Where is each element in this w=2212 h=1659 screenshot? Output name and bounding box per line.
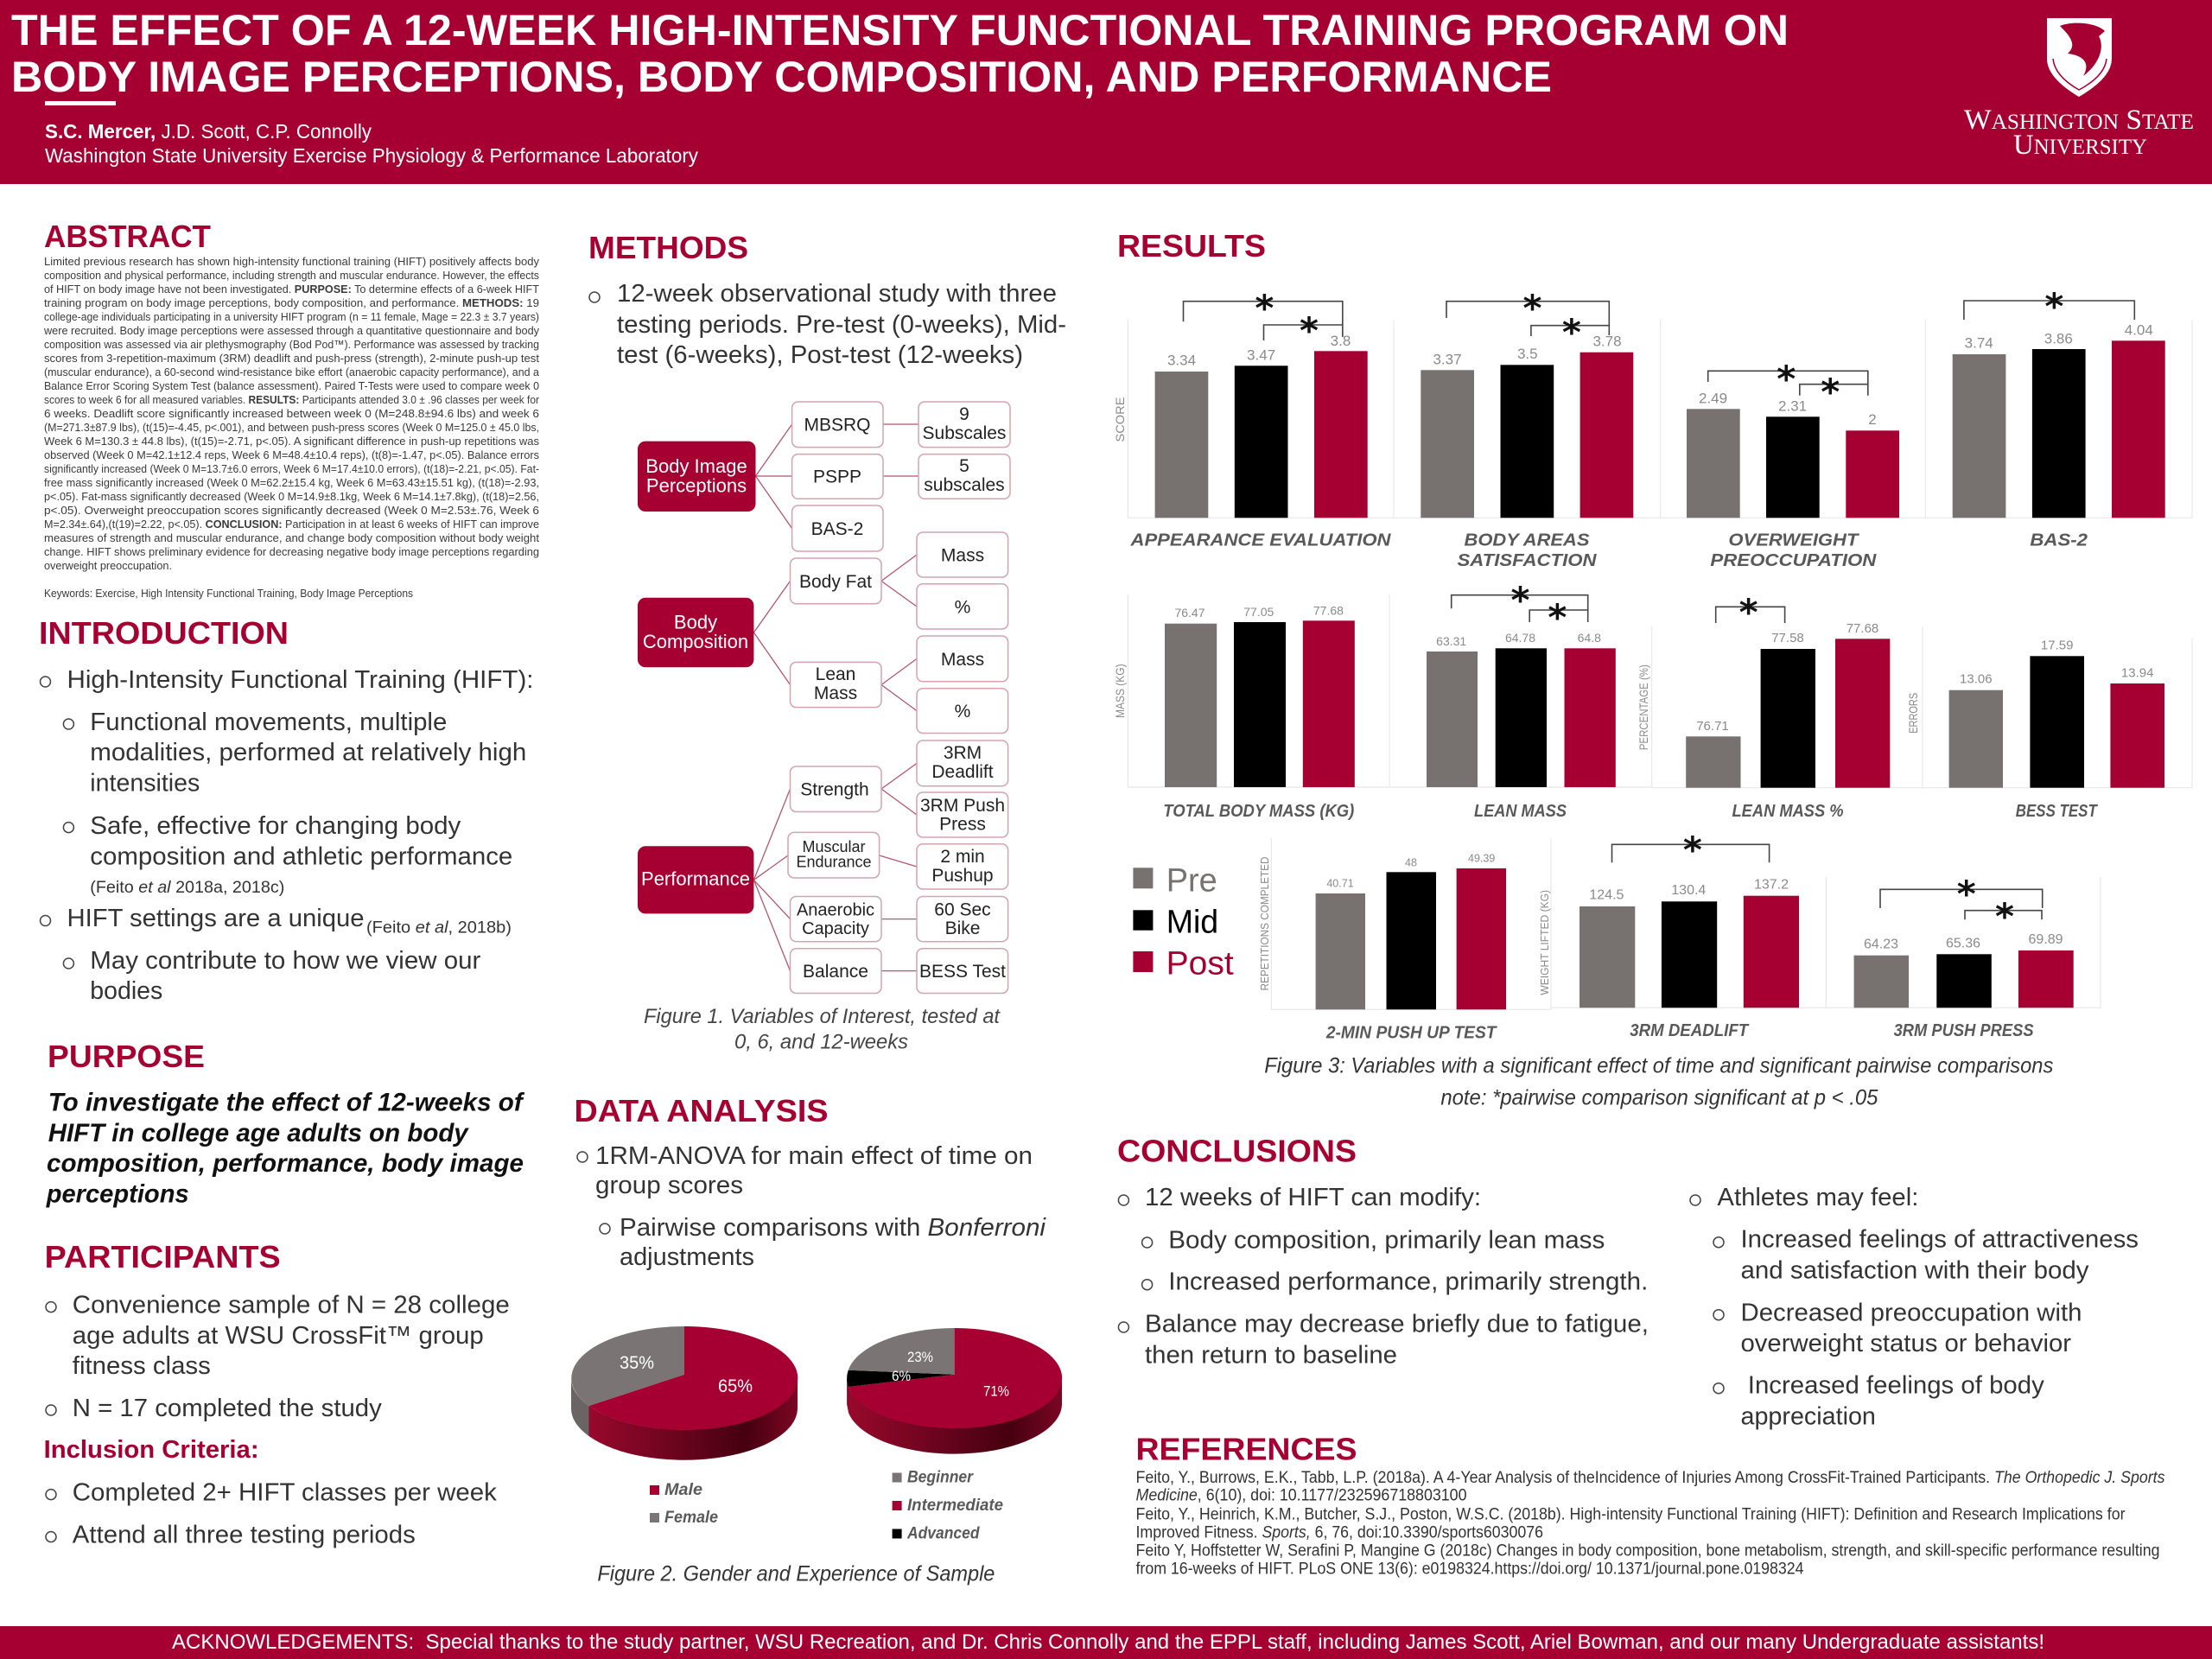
- abstract body text: (muscular endurance), a 60-second wind-resistance bike effort (anaerobic capacity performance), and a: [44, 365, 540, 378]
- panel: data analysis: [574, 1093, 1047, 1271]
- chart: 3RM push press: 64.23: [1864, 937, 1898, 951]
- abstract body text: overweight preoccupation.: [44, 559, 172, 572]
- significance brackets: *: [1562, 311, 1581, 353]
- reference list: Feito, Y., Heinrich, K.M., Butcher, S.J., Poston, W.S.C. (2018b). High-intensity Functional Training (HIFT): Definition and Research Implications for: [1135, 1505, 2126, 1523]
- pie chart: experience: 23%: [907, 1349, 933, 1365]
- chart: 3RM deadlift: 124.5: [1589, 888, 1624, 903]
- chart: lean mass percent: 76.71: [1696, 719, 1729, 734]
- abstract body text: Week 6 M=130.3 ± 44.8 lbs), (t(15)=-2.71, p<.05). A significant difference in push-up repetitions was: [44, 435, 539, 448]
- conclusions right column: Athletes may feel:: [1717, 1184, 1918, 1211]
- chart: total body mass: 77.05: [1243, 605, 1274, 619]
- significance brackets: [1184, 287, 1343, 352]
- introduction bullets: intensities: [90, 769, 200, 797]
- conclusions right column: and satisfaction with their body: [1740, 1256, 2089, 1284]
- chart: appearance evaluation: SCORE: [1113, 397, 1127, 442]
- abstract body text: composition was assessed via air plethysmography (Bod Pod™). Performance was assessed by tracking: [44, 338, 539, 351]
- introduction bullets: May contribute to how we view our: [90, 947, 481, 975]
- chart: 2-min push up test: 40.71: [1326, 877, 1354, 889]
- chart: appearance evaluation: 3.34: [1167, 353, 1196, 369]
- abstract body text: [43, 255, 540, 600]
- conclusions right column: overweight status or behavior: [1740, 1330, 2071, 1357]
- nodes: second level measures: Lean: [816, 664, 855, 684]
- chart: lean mass percent: [1637, 591, 1923, 821]
- nodes: third level measures: Mass: [941, 650, 984, 670]
- nodes: second level measures: Capacity: [802, 919, 869, 938]
- node: performance: Performance: [641, 868, 750, 890]
- chart: overweight preoccupation: 2.49: [1699, 391, 1727, 407]
- significance bracket: [1716, 591, 1785, 633]
- chart: lean mass percent: 77.68: [1847, 621, 1878, 636]
- chart: 2-min push up test: REPETITIONS COMPLETED: [1258, 857, 1271, 990]
- WSU wordmark: UNIVERSITY: [2013, 130, 2147, 161]
- chart: 3RM push press: [1826, 873, 2101, 1040]
- participants bullets: fitness class: [73, 1352, 211, 1380]
- purpose statement: perceptions: [46, 1180, 189, 1209]
- WSU wordmark: [1964, 105, 2194, 161]
- figure 3 caption: Figure 3: Variables with a significant effect of time and significant pairwise comparisons: [1264, 1054, 2053, 1078]
- chart: 2-min push up test: 48: [1405, 857, 1417, 869]
- nodes: third level measures: 3RM: [944, 743, 982, 763]
- nodes: second level measures: BAS-2: [811, 519, 863, 539]
- conclusions right column: Increased feelings of body: [1748, 1372, 2044, 1400]
- methods bullet: [589, 280, 1066, 369]
- nodes: third level measures: 9: [959, 404, 969, 424]
- participants bullets: N = 17 completed the study: [73, 1395, 382, 1422]
- nodes: second level measures: Mass: [814, 683, 857, 703]
- authors and affiliation: [45, 120, 698, 167]
- nodes: third level measures: subscales: [924, 475, 1005, 495]
- chart: 3RM deadlift: 130.4: [1671, 883, 1706, 898]
- significance brackets: *: [1300, 309, 1319, 352]
- pie legend: gender: [650, 1481, 718, 1527]
- significance brackets: *: [1957, 873, 1976, 915]
- chart: total body mass: TOTAL BODY MASS (KG): [1163, 802, 1355, 821]
- chart: total body mass: 76.47: [1174, 606, 1205, 620]
- inclusion criteria: Completed 2+ HIFT classes per week: [73, 1478, 497, 1506]
- chart: 2-min push up test: 49.39: [1468, 853, 1495, 865]
- conclusions left column: [1118, 1184, 1649, 1369]
- participants bullets: [46, 1291, 510, 1422]
- reference list: Medicine, 6(10), doi: 10.1177/232596718803100: [1135, 1487, 1467, 1505]
- chart: overweight preoccupation: OVERWEIGHT: [1728, 531, 1859, 550]
- nodes: third level measures: 2 min: [940, 847, 985, 867]
- nodes: third level measures: 5: [959, 456, 969, 476]
- figure 1 caption: 0, 6, and 12-weeks: [734, 1031, 908, 1054]
- methods bullet: testing periods. Pre-test (0-weeks), Mid-: [617, 311, 1066, 339]
- introduction bullets: HIFT settings are a unique: [67, 905, 365, 932]
- authors and affiliation: S.C. Mercer, J.D. Scott, C.P. Connolly: [45, 120, 372, 143]
- reference list: Improved Fitness. Sports, 6, 76, doi:10.3390/sports6030076: [1135, 1523, 1543, 1541]
- abstract body text: measures of strength and muscular endurance, and change body composition without body weight: [44, 531, 539, 544]
- title: [11, 6, 1789, 105]
- chart: 2-min push up test: 2-MIN PUSH UP TEST: [1325, 1024, 1497, 1043]
- significance bracket: [1612, 829, 1770, 871]
- significance brackets: *: [1523, 287, 1542, 329]
- figure 3 caption: [1264, 1054, 2053, 1109]
- chart: overweight preoccupation: 2: [1868, 411, 1877, 428]
- nodes: third level measures: [917, 402, 1010, 994]
- abstract body text: scores from 3-repetition-maximum (3RM) deadlift and push-press (strength), 2-minute push-up test: [44, 352, 539, 365]
- significance brackets: [1880, 873, 2043, 938]
- node: body image perceptions: Perceptions: [646, 474, 747, 496]
- nodes: third level measures: Pushup: [931, 866, 994, 886]
- nodes: third level measures: Press: [939, 814, 986, 835]
- icon: WSU shield logo: [2047, 18, 2112, 97]
- pie legend: experience: Beginner: [907, 1469, 974, 1487]
- pie chart: gender: 35%: [620, 1353, 654, 1373]
- panel: purpose: [46, 1039, 525, 1209]
- chart: 3RM deadlift: [1538, 829, 1826, 1040]
- chart: total body mass: [1113, 594, 1389, 821]
- WSU wordmark: WASHINGTON STATE: [1964, 105, 2194, 136]
- chart: lean mass percent: PERCENTAGE (%): [1637, 664, 1650, 750]
- chart: BAS-2: 3.86: [2044, 330, 2073, 346]
- chart: total body mass: MASS (KG): [1113, 664, 1127, 718]
- conclusions right column: Decreased preoccupation with: [1740, 1299, 2082, 1326]
- introduction bullets: modalities, performed at relatively high: [90, 739, 526, 766]
- chart: lean mass: LEAN MASS: [1474, 802, 1567, 821]
- significance brackets: *: [1548, 596, 1567, 639]
- title: BODY IMAGE PERCEPTIONS, BODY COMPOSITION, AND PERFORMANCE: [11, 53, 1552, 101]
- introduction bullets: High-Intensity Functional Training (HIFT):: [67, 666, 534, 694]
- chart: BESS test: ERRORS: [1906, 693, 1920, 734]
- chart: appearance evaluation: [1113, 287, 1394, 550]
- legend: pre mid post: [1133, 863, 1234, 982]
- abstract body text: 6 weeks. Deadlift score significantly increased between week 0 (M=248.8±94.6 lbs) and week 6: [44, 407, 539, 420]
- nodes: third level measures: BESS Test: [919, 962, 1006, 982]
- legend: pre mid post: Pre: [1166, 863, 1217, 899]
- heading: data analysis: DATA ANALYSIS: [574, 1093, 828, 1128]
- heading: purpose: PURPOSE: [48, 1039, 205, 1074]
- abstract body text: p<.05). Overweight preoccupation scores significantly decreased (Week 0 M=2.53±.76, Week 6: [44, 504, 539, 517]
- chart: 2-min push up test: [1258, 838, 1551, 1043]
- data analysis bullets: Pairwise comparisons with Bonferroni: [620, 1214, 1047, 1242]
- nodes: second level measures: Balance: [803, 962, 868, 982]
- conclusions left column: Body composition, primarily lean mass: [1168, 1226, 1605, 1254]
- chart: body areas satisfaction: SATISFACTION: [1457, 551, 1597, 570]
- chart: BESS test: 13.94: [2121, 665, 2153, 680]
- chart: 3RM deadlift: 137.2: [1754, 878, 1789, 893]
- figure 1: variables of interest tree diagram: [638, 402, 1010, 994]
- significance bracket: *: [1739, 591, 1758, 633]
- reference list: Feito, Y., Burrows, E.K., Tabb, L.P. (2018a). A 4-Year Analysis of theIncidence of Injuries Among CrossFit-Trained Participants. The Orthopedic J. Sports: [1135, 1469, 2165, 1487]
- abstract body text: were recruited. Body image perceptions were assessed through a quantitative questionnaire and body: [43, 324, 539, 337]
- chart: lean mass: 64.78: [1505, 631, 1535, 645]
- node: body image perceptions: Body Image: [645, 455, 747, 477]
- pie legend: experience: Intermediate: [907, 1497, 1003, 1515]
- chart: BAS-2: 3.74: [1965, 335, 1993, 352]
- introduction bullets: bodies: [90, 977, 162, 1005]
- abstract body text: Balance Error Scoring System Test (balance assessment). Paired T-Tests were used to compare week 0: [44, 379, 539, 392]
- chart: body areas satisfaction: 3.37: [1433, 352, 1462, 368]
- nodes: second level measures: Body Fat: [799, 572, 872, 592]
- figure 1 caption: Figure 1. Variables of Interest, tested at: [644, 1005, 1001, 1028]
- nodes: second level measures: Endurance: [796, 854, 872, 871]
- inclusion criteria: Inclusion Criteria:: [44, 1436, 259, 1464]
- node: body image perceptions: [638, 442, 755, 512]
- introduction bullets: [40, 666, 534, 1005]
- chart: 3RM deadlift: WEIGHT LIFTED (KG): [1538, 890, 1551, 995]
- panel: conclusions: [1117, 1133, 2139, 1430]
- heading: introduction: INTRODUCTION: [39, 615, 289, 651]
- panel: references: [1135, 1431, 2165, 1579]
- pie legend: experience: Advanced: [906, 1525, 980, 1543]
- abstract body text: (M=271.3±87.9 lbs), (t(15)=-4.45, p<.001), and between push-press scores (Week 0 M=125.0 ± 45.0 lbs,: [44, 421, 539, 434]
- node: body composition: Composition: [643, 631, 748, 652]
- significance bracket: *: [2044, 285, 2063, 327]
- authors and affiliation: Washington State University Exercise Physiology & Performance Laboratory: [45, 144, 698, 167]
- significance brackets: *: [1777, 358, 1796, 400]
- nodes: third level measures: Subscales: [923, 423, 1006, 443]
- chart: overweight preoccupation: 2.31: [1778, 398, 1807, 415]
- pie chart: gender: [571, 1326, 798, 1460]
- reference list: Feito Y, Hoffstetter W, Serafini P, Mangine G (2018c) Changes in body composition, bone metabolism, strength, and skill-specific performance resulting: [1135, 1542, 2160, 1560]
- nodes: second level measures: [788, 402, 883, 994]
- chart: 3RM push press: 3RM PUSH PRESS: [1894, 1021, 2034, 1040]
- introduction bullets: composition and athletic performance: [90, 842, 512, 870]
- chart: lean mass: [1389, 579, 1652, 821]
- reference list: from 16-weeks of HIFT. PLoS ONE 13(6): e0198324.https://doi.org/ 10.1371/journal.pone.0198324: [1135, 1560, 1804, 1579]
- nodes: second level measures: Strength: [800, 779, 869, 800]
- nodes: third level measures: Bike: [945, 918, 980, 938]
- chart: 3RM deadlift: 3RM DEADLIFT: [1630, 1021, 1750, 1040]
- chart: appearance evaluation: 3.47: [1247, 347, 1275, 364]
- heading: abstract: ABSTRACT: [44, 219, 211, 254]
- nodes: third level measures: 60 Sec: [934, 899, 991, 919]
- introduction bullets: (Feito et al 2018a, 2018c): [90, 879, 284, 897]
- abstract body text: significantly increased (Week 0 M=13.7±6.0 errors, Week 6 M=17.4±10.0 errors), (t(18)=-2.21, p<.05). Fat-: [44, 462, 539, 475]
- introduction bullets: (Feito et al, 2018b): [366, 919, 512, 938]
- pie chart: experience: 71%: [983, 1383, 1009, 1400]
- chart: 3RM push press: 65.36: [1946, 937, 1980, 951]
- abstract body text: composition and physical performance, including strength and muscular endurance. However, the effects: [44, 269, 539, 282]
- panel: abstract: [43, 219, 540, 600]
- pie legend: gender: Female: [664, 1509, 718, 1527]
- figure 1 caption: [644, 1005, 1001, 1054]
- data analysis bullets: [577, 1142, 1047, 1271]
- nodes: third level measures: %: [955, 702, 970, 721]
- panel: participants: [44, 1239, 510, 1548]
- conclusions right column: appreciation: [1740, 1402, 1876, 1430]
- chart: appearance evaluation: 3.8: [1331, 333, 1351, 349]
- methods bullet: test (6-weeks), Post-test (12-weeks): [617, 341, 1023, 369]
- abstract body text: observed (Week 0 M=42.1±12.4 reps, Week 6 M=48.4±10.4 reps), (t(8)=-1.47, p<.05). Balance errors: [44, 448, 539, 461]
- purpose statement: composition, performance, body image: [47, 1149, 524, 1178]
- pie chart: experience: [847, 1328, 1062, 1454]
- significance bracket: *: [1683, 829, 1702, 871]
- data analysis bullets: adjustments: [620, 1243, 754, 1271]
- abstract body text: p<.05). Fat-mass significantly decreased (Week 0 M=14.9±8.1kg, Week 6 M=14.1±7.8kg), (t(18)=2.56,: [44, 490, 539, 503]
- chart: BESS test: [1906, 638, 2192, 821]
- legend: pre mid post: Mid: [1166, 904, 1218, 940]
- abstract body text: Limited previous research has shown high-intensity functional training (HIFT) positively affects body: [44, 255, 539, 268]
- nodes: third level measures: 3RM Push: [920, 796, 1005, 816]
- nodes: third level measures: %: [955, 598, 970, 617]
- methods bullet: 12-week observational study with three: [617, 280, 1057, 308]
- pie chart: gender: 65%: [718, 1376, 753, 1396]
- figure 2 caption: Figure 2. Gender and Experience of Sample: [597, 1561, 995, 1586]
- significance brackets: *: [1255, 287, 1274, 329]
- abstract body text: training program on body image perceptions, body composition, and performance. METHODS: 19: [44, 296, 539, 309]
- significance bracket: [1964, 285, 2134, 327]
- heading: results: RESULTS: [1117, 228, 1266, 264]
- inclusion criteria: Attend all three testing periods: [73, 1521, 416, 1548]
- panel: methods: [588, 230, 1066, 369]
- abstract body text: scores to week 6 for all measured variables. RESULTS: Participants attended 3.0 ± .96 classes per week for: [44, 393, 540, 406]
- conclusions left column: Increased performance, primarily strength.: [1168, 1268, 1648, 1296]
- data analysis bullets: 1RM-ANOVA for main effect of time on: [595, 1142, 1033, 1170]
- significance brackets: *: [1511, 579, 1530, 621]
- introduction bullets: Functional movements, multiple: [90, 709, 447, 736]
- purpose statement: HIFT in college age adults on body: [48, 1119, 469, 1147]
- chart: total body mass: 77.68: [1313, 604, 1344, 618]
- heading: references: REFERENCES: [1135, 1431, 1357, 1466]
- nodes: third level measures: Mass: [941, 546, 984, 565]
- header band: [0, 0, 2212, 184]
- footer: acknowledgements: ACKNOWLEDGEMENTS: Special thanks to the study partner, WSU Recreation, and Dr. Chris Connolly and the EPPL staff, including James Scott, Ariel Bowman, and our many Undergraduate assistants!: [172, 1630, 2044, 1654]
- heading: conclusions: CONCLUSIONS: [1117, 1133, 1357, 1168]
- figure 3 caption: note: *pairwise comparison significant at p < .05: [1440, 1085, 1878, 1109]
- chart: BAS-2: 4.04: [2125, 322, 2153, 339]
- node: body composition: Body: [674, 612, 717, 632]
- title: THE EFFECT OF A 12-WEEK HIGH-INTENSITY FUNCTIONAL TRAINING PROGRAM ON: [11, 6, 1789, 54]
- abstract body text: change. HIFT shows preliminary evidence for decreasing negative body image perceptions regarding: [44, 545, 539, 558]
- chart: lean mass percent: 77.58: [1771, 631, 1804, 645]
- abstract body text: M=2.34±.64),(t(19)=2.22, p<.05). CONCLUSION: Participation in at least 6 weeks of HIFT can improve: [44, 518, 539, 531]
- pie legend: gender: Male: [664, 1481, 702, 1499]
- chart: body areas satisfaction: [1394, 287, 1661, 570]
- reference list: [1135, 1469, 2165, 1579]
- chart: BESS test: 17.59: [2041, 639, 2073, 653]
- chart: lean mass: 64.8: [1578, 631, 1601, 645]
- significance brackets: *: [1821, 371, 1840, 413]
- significance brackets: [1708, 358, 1868, 413]
- conclusions left column: 12 weeks of HIFT can modify:: [1145, 1184, 1481, 1211]
- chart: body areas satisfaction: BODY AREAS: [1464, 531, 1590, 550]
- chart: body areas satisfaction: 3.78: [1592, 334, 1622, 350]
- chart: BAS-2: [1925, 285, 2192, 550]
- node: performance: [638, 846, 753, 913]
- heading: methods: METHODS: [588, 230, 748, 265]
- heading: participants: PARTICIPANTS: [45, 1239, 281, 1274]
- chart: body areas satisfaction: 3.5: [1517, 346, 1538, 362]
- conclusions right column: [1690, 1184, 2139, 1430]
- participants bullets: age adults at WSU CrossFit™ group: [73, 1322, 484, 1350]
- abstract body text: college-age individuals participating in a university HIFT program (n = 11 female, Mage = 22.3 ± 3.7 years): [44, 310, 539, 323]
- introduction bullets: Safe, effective for changing body: [90, 812, 461, 840]
- chart: lean mass percent: LEAN MASS %: [1732, 802, 1844, 821]
- pie legend: experience: [893, 1469, 1003, 1543]
- significance brackets: [1446, 287, 1609, 353]
- conclusions left column: Balance may decrease briefly due to fatigue,: [1145, 1311, 1649, 1338]
- abstract body text: free mass significantly increased (Week 0 M=62.2±15.4 kg, Week 6 M=63.43±15.51 kg), (t(18)=-2.93,: [44, 476, 539, 489]
- nodes: second level measures: Anaerobic: [797, 900, 874, 919]
- significance brackets: *: [1995, 895, 2014, 938]
- abstract body text: of HIFT on body image have not been investigated. PURPOSE: To determine effects of a 6-week HIFT: [44, 283, 539, 296]
- significance brackets: [1452, 579, 1588, 639]
- purpose statement: [46, 1089, 525, 1209]
- purpose statement: To investigate the effect of 12-weeks of: [48, 1089, 525, 1117]
- inclusion criteria: [44, 1436, 497, 1548]
- chart: BESS test: BESS TEST: [2016, 802, 2098, 821]
- chart: BESS test: 13.06: [1960, 672, 1993, 687]
- nodes: second level measures: MBSRQ: [804, 416, 871, 435]
- panel: introduction: [39, 615, 534, 1005]
- chart: appearance evaluation: APPEARANCE EVALUATION: [1129, 531, 1391, 550]
- data analysis bullets: group scores: [595, 1172, 743, 1199]
- legend: pre mid post: Post: [1166, 946, 1234, 982]
- pie chart: experience: 6%: [892, 1368, 911, 1384]
- chart: overweight preoccupation: [1661, 320, 1925, 570]
- chart: 3RM push press: 69.89: [2028, 932, 2063, 947]
- nodes: third level measures: Deadlift: [931, 762, 994, 782]
- nodes: second level measures: Muscular: [802, 838, 866, 855]
- conclusions left column: then return to baseline: [1145, 1341, 1397, 1369]
- chart: BAS-2: BAS-2: [2030, 531, 2088, 550]
- footer: acknowledgements: [0, 1626, 2212, 1659]
- conclusions right column: Increased feelings of attractiveness: [1740, 1226, 2139, 1254]
- chart: overweight preoccupation: PREOCCUPATION: [1710, 551, 1877, 570]
- abstract body text: Keywords: Exercise, High Intensity Functional Training, Body Image Perceptions: [44, 587, 413, 600]
- nodes: second level measures: PSPP: [813, 467, 861, 487]
- participants bullets: Convenience sample of N = 28 college: [73, 1291, 510, 1319]
- node: body composition: [638, 598, 753, 667]
- chart: lean mass: 63.31: [1436, 634, 1466, 648]
